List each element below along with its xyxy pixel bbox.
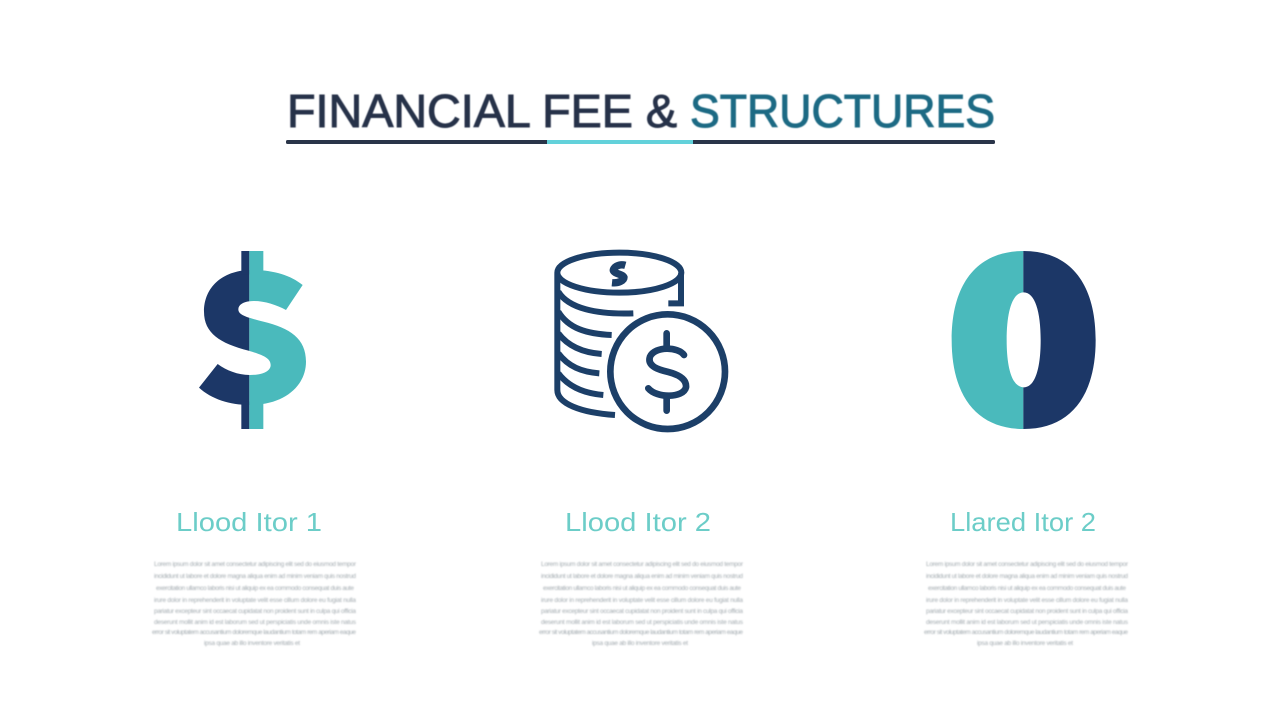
column 1 body text: exercitation ullamco laboris nisi ut aliquip ex ea commodo consequat duis aute: [156, 585, 354, 592]
column 3 body text: deserunt mollit anim id est laborum sed ut perspiciatis unde omnis iste natus: [926, 619, 1129, 626]
column 3 body text: error sit voluptatem accusantium doloremque laudantium totam rem aperiam eaque: [924, 629, 1128, 636]
column 3 body text: incididunt ut labore et dolore magna aliqua enim ad minim veniam quis nostrud: [926, 573, 1128, 580]
icon: split zero: [952, 251, 1096, 429]
column 1 body text: deserunt mollit anim id est laborum sed ut perspiciatis unde omnis iste natus: [154, 619, 357, 626]
icon: coin stack with dollar coin: [557, 253, 725, 429]
column 2 body text: exercitation ullamco laboris nisi ut aliquip ex ea commodo consequat duis aute: [543, 585, 741, 592]
column 2 body text: error sit voluptatem accusantium doloremque laudantium totam rem aperiam eaque: [539, 629, 743, 636]
column 2 body text: [539, 561, 744, 647]
title: FINANCIAL FEE &: [287, 85, 677, 137]
title: STRUCTURES: [690, 85, 995, 137]
column 3 body text: irure dolor in reprehenderit in voluptate velit esse cillum dolore eu fugiat nulla: [926, 597, 1128, 604]
column 2 body text: irure dolor in reprehenderit in voluptate velit esse cillum dolore eu fugiat nulla: [541, 597, 743, 604]
column 1 heading: Llood Itor 1: [176, 507, 322, 537]
column 1 body text: irure dolor in reprehenderit in voluptate velit esse cillum dolore eu fugiat nulla: [154, 597, 356, 604]
column 1 body text: [152, 561, 357, 647]
column 1 body text: ipsa quae ab illo inventore veritatis et: [204, 640, 300, 647]
column 3 body text: [924, 561, 1129, 647]
column 2 body text: pariatur excepteur sint occaecat cupidatat non proident sunt in culpa qui officia: [541, 608, 743, 615]
column 3 body text: Lorem ipsum dolor sit amet consectetur adipiscing elit sed do eiusmod tempor: [926, 561, 1129, 568]
icon: split dollar sign: [199, 251, 306, 429]
column 1 body text: Lorem ipsum dolor sit amet consectetur adipiscing elit sed do eiusmod tempor: [154, 561, 357, 568]
column 3 body text: pariatur excepteur sint occaecat cupidatat non proident sunt in culpa qui officia: [926, 608, 1128, 615]
column 3 heading: Llared Itor 2: [950, 507, 1096, 537]
column 1 body text: pariatur excepteur sint occaecat cupidatat non proident sunt in culpa qui officia: [154, 608, 356, 615]
title underline: [286, 140, 995, 144]
column 3 body text: ipsa quae ab illo inventore veritatis et: [977, 640, 1073, 647]
column 1 body text: error sit voluptatem accusantium doloremque laudantium totam rem aperiam eaque: [152, 629, 356, 636]
column 2 body text: deserunt mollit anim id est laborum sed ut perspiciatis unde omnis iste natus: [541, 619, 744, 626]
column 3 body text: exercitation ullamco laboris nisi ut aliquip ex ea commodo consequat duis aute: [928, 585, 1126, 592]
title: [287, 85, 995, 137]
column 2 body text: incididunt ut labore et dolore magna aliqua enim ad minim veniam quis nostrud: [541, 573, 743, 580]
column 2 body text: ipsa quae ab illo inventore veritatis et: [592, 640, 688, 647]
column 2 body text: Lorem ipsum dolor sit amet consectetur adipiscing elit sed do eiusmod tempor: [541, 561, 744, 568]
column 2 heading: Llood Itor 2: [565, 507, 711, 537]
column 1 body text: incididunt ut labore et dolore magna aliqua enim ad minim veniam quis nostrud: [154, 573, 356, 580]
